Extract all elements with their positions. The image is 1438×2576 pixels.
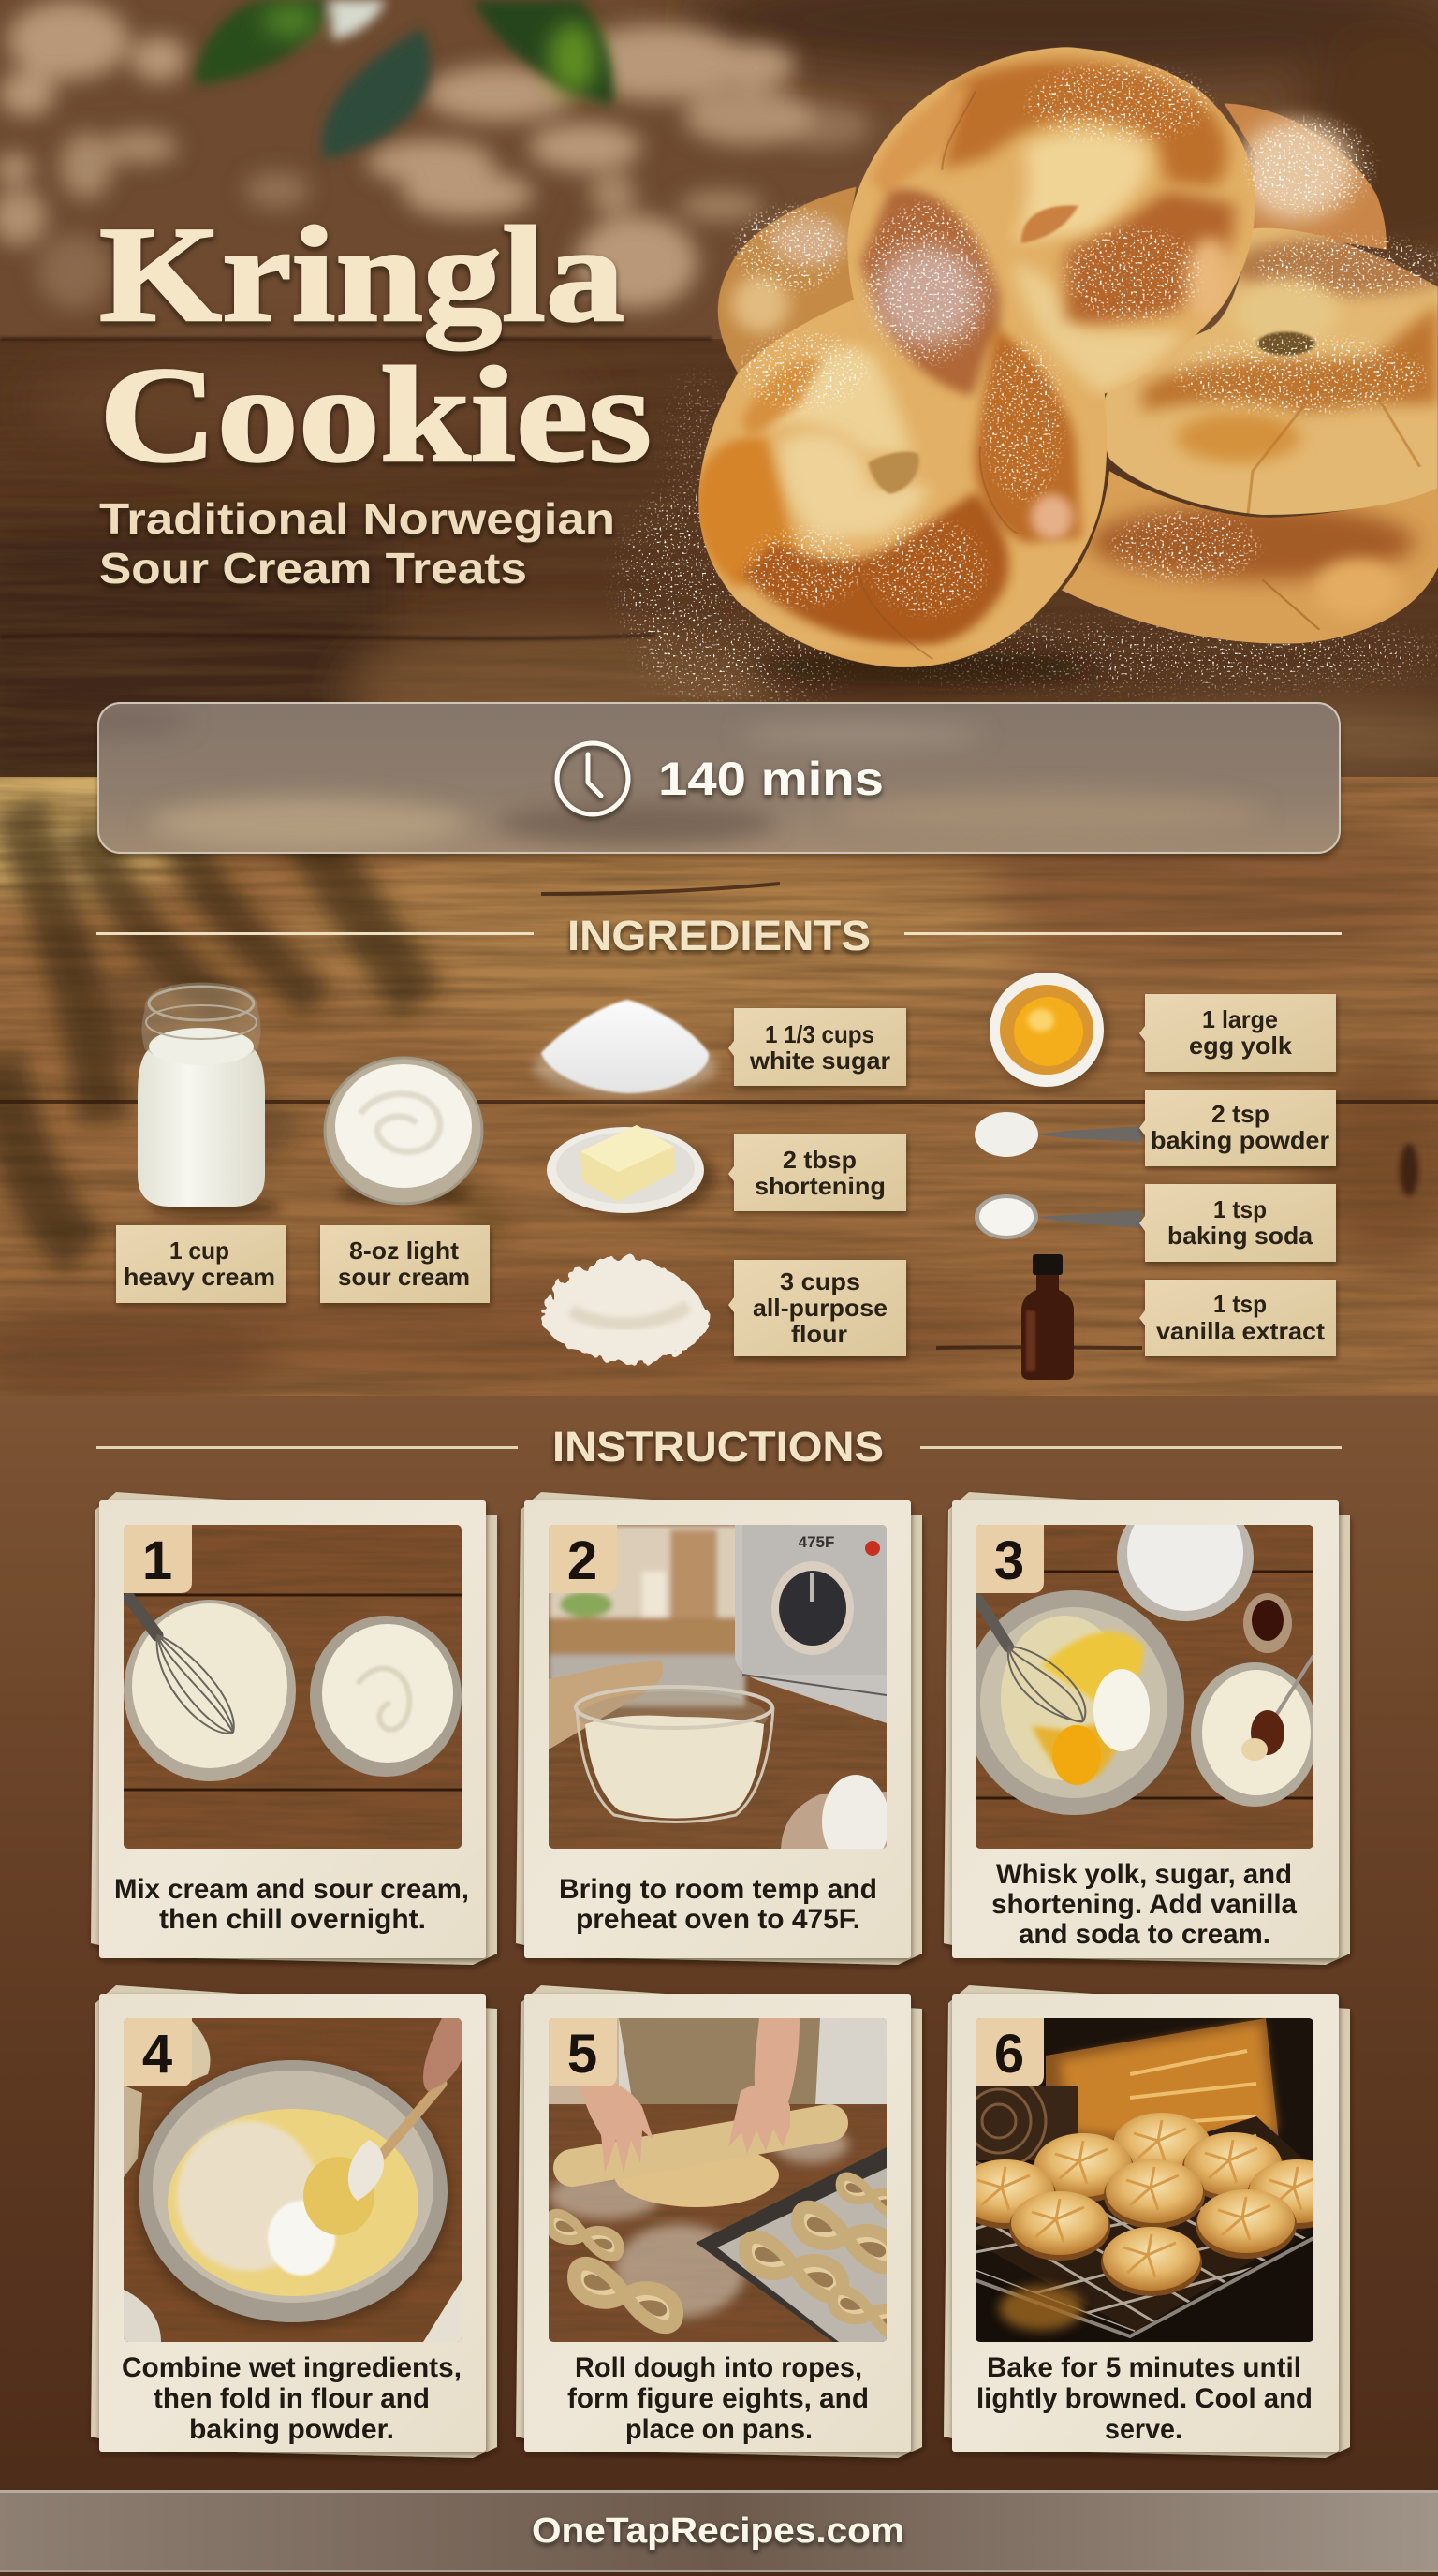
ingredient: vanilla extract bottle xyxy=(1021,1254,1074,1380)
heading: ingredients: INGREDIENTS xyxy=(567,912,871,959)
title: Kringla Cookies: Kringla xyxy=(99,198,624,350)
ingredient: baking soda spoon xyxy=(975,1194,1142,1239)
photo: whisking yolk and sugar xyxy=(963,1494,1318,1849)
icon: green leaves at top xyxy=(195,0,613,159)
label: all-purpose flour: all-purpose xyxy=(753,1294,888,1322)
cookie: back left bun xyxy=(718,187,857,379)
upper hole xyxy=(1021,205,1078,243)
ingredient: egg yolk bowl xyxy=(990,973,1107,1090)
bottom rust band xyxy=(741,492,1008,647)
step number 6: 6 xyxy=(994,2024,1024,2085)
ingredient: white sugar pile xyxy=(534,1000,717,1095)
label: baking soda: baking soda xyxy=(1167,1222,1313,1250)
icon: clock xyxy=(557,743,628,814)
step text 5: form figure eights, and xyxy=(567,2383,869,2414)
photo: room temp and preheated oven xyxy=(549,1525,889,1868)
step number 3: 3 xyxy=(994,1530,1024,1591)
step card 2 xyxy=(516,1492,922,1965)
ingredient: heavy cream jar xyxy=(138,984,281,1217)
step card 3 xyxy=(944,1492,1350,1965)
step text 3 xyxy=(991,1859,1297,1950)
step number 5 xyxy=(549,2018,617,2086)
hero photo: stack of kringla cookies xyxy=(689,28,1438,684)
label: 1 cup heavy cream: 1 cup xyxy=(169,1237,229,1265)
label: egg yolk: egg yolk xyxy=(1189,1032,1293,1060)
label: all-purpose flour: flour xyxy=(791,1320,847,1348)
photo: rolling and shaping dough xyxy=(549,2018,911,2342)
label: 1 cup heavy cream: heavy cream xyxy=(124,1263,275,1291)
step card 1 xyxy=(91,1492,497,1965)
step number 1: 1 xyxy=(142,1530,172,1591)
sugar dusting on wood xyxy=(580,356,1438,702)
step number 4: 4 xyxy=(142,2024,172,2085)
step text 4: then fold in flour and xyxy=(154,2383,430,2414)
label: baking powder: baking powder xyxy=(1151,1126,1329,1154)
top band of upper loop xyxy=(871,61,1227,196)
step text 6: lightly browned. Cool and xyxy=(976,2383,1313,2414)
label: baking powder: 2 tsp xyxy=(1211,1100,1269,1128)
label: vanilla extract: 1 tsp xyxy=(1213,1290,1267,1318)
label: 8-oz light sour cream: sour cream xyxy=(338,1263,470,1291)
time text: 140 mins xyxy=(658,753,884,805)
left orange band xyxy=(694,358,823,588)
step text 6: serve. xyxy=(1105,2414,1182,2445)
heading: instructions: INSTRUCTIONS xyxy=(552,1423,884,1471)
title: Kringla Cookies: Cookies xyxy=(99,339,652,490)
step text 2: Bring to room temp and xyxy=(559,1874,877,1905)
title: Kringla Cookies xyxy=(99,198,652,490)
lower rim xyxy=(803,648,1014,670)
label: baking powder xyxy=(1139,1090,1336,1166)
label: vanilla extract xyxy=(1139,1280,1336,1356)
label: shortening: shortening xyxy=(755,1172,886,1200)
step card 5 xyxy=(516,1985,922,2458)
step text 5: Roll dough into ropes, xyxy=(575,2352,862,2383)
label: white sugar: white sugar xyxy=(749,1046,890,1075)
label: 1 cup heavy cream xyxy=(116,1225,286,1303)
lower hole xyxy=(868,452,919,494)
photo: room temp and preheated oven: 475F xyxy=(799,1533,834,1551)
step text 1: Mix cream and sour cream, xyxy=(114,1874,469,1905)
subtitle xyxy=(99,494,615,593)
lower strand xyxy=(975,329,1080,542)
step number 4 xyxy=(124,2018,192,2086)
step text 6: Bake for 5 minutes until xyxy=(987,2352,1301,2383)
label: egg yolk xyxy=(1139,994,1336,1072)
cookie: middle right ring xyxy=(1095,225,1438,517)
label: 8-oz light sour cream xyxy=(320,1225,490,1303)
step number 2 xyxy=(549,1525,617,1593)
footer text: OneTapRecipes.com xyxy=(532,2511,904,2551)
heading: ingredients xyxy=(96,912,1342,959)
label: all-purpose flour: 3 cups xyxy=(780,1267,860,1295)
label: white sugar xyxy=(728,1008,906,1086)
step number 3 xyxy=(976,1525,1044,1593)
label: egg yolk: 1 large xyxy=(1202,1005,1278,1033)
step text 4 xyxy=(122,2352,462,2445)
label: shortening xyxy=(728,1134,906,1211)
label: shortening: 2 tbsp xyxy=(783,1146,857,1174)
label: baking soda xyxy=(1139,1184,1336,1262)
pale inner lower loop xyxy=(766,347,928,540)
step text 4: baking powder. xyxy=(189,2414,394,2445)
ingredients wood background xyxy=(0,730,1438,1413)
step text 3: Whisk yolk, sugar, and xyxy=(996,1859,1292,1890)
photo: mixing cream and sour cream xyxy=(124,1525,462,1849)
step text 5 xyxy=(567,2352,869,2445)
cookie: back right bun xyxy=(1224,103,1387,250)
step text 1: then chill overnight. xyxy=(159,1904,426,1935)
step card 4 xyxy=(91,1985,497,2458)
leaf shadows xyxy=(0,777,506,1254)
ingredient: sour cream bowl xyxy=(325,1058,482,1205)
label: all-purpose flour xyxy=(728,1260,906,1356)
label: baking soda: 1 tsp xyxy=(1213,1195,1267,1223)
heading: instructions xyxy=(96,1423,1342,1471)
step card 6 xyxy=(944,1985,1350,2458)
instructions section background xyxy=(0,1396,1438,2576)
ingredient: flour pile xyxy=(540,1256,709,1365)
cookie: bottom right xyxy=(1062,471,1438,644)
step text 6 xyxy=(976,2352,1313,2445)
step text 3: and soda to cream. xyxy=(1019,1919,1270,1950)
hero photo: wooden table background xyxy=(0,0,1438,805)
step text 2 xyxy=(559,1874,877,1935)
ingredient: shortening on plate xyxy=(547,1125,715,1217)
step number 2: 2 xyxy=(567,1530,597,1591)
photo: baking in the oven xyxy=(952,2018,1348,2342)
subtitle: Sour Cream Treats xyxy=(99,544,527,593)
cookie: main figure eight xyxy=(689,28,1262,684)
time bar xyxy=(56,702,1341,859)
label: vanilla extract: vanilla extract xyxy=(1156,1317,1325,1345)
pale inner upper loop xyxy=(1014,133,1234,394)
step text 4: Combine wet ingredients, xyxy=(122,2352,462,2383)
step text 3: shortening. Add vanilla xyxy=(991,1889,1297,1920)
subtitle: Traditional Norwegian xyxy=(99,494,615,543)
footer bar xyxy=(0,2490,1438,2572)
label: 8-oz light sour cream: 8-oz light xyxy=(349,1237,459,1265)
photo: folding in flour xyxy=(124,2018,462,2342)
powdered sugar on cookies xyxy=(689,45,1438,630)
step text 5: place on pans. xyxy=(625,2414,813,2445)
ingredient: baking powder spoon xyxy=(975,1112,1142,1157)
step number 5: 5 xyxy=(567,2024,597,2085)
dusted strand xyxy=(861,189,1000,396)
step text 1 xyxy=(114,1874,469,1935)
step number 6 xyxy=(976,2018,1044,2086)
step number 1 xyxy=(124,1525,192,1593)
label: white sugar: 1 1/3 cups xyxy=(765,1020,874,1048)
step text 2: preheat oven to 475F. xyxy=(576,1904,860,1935)
